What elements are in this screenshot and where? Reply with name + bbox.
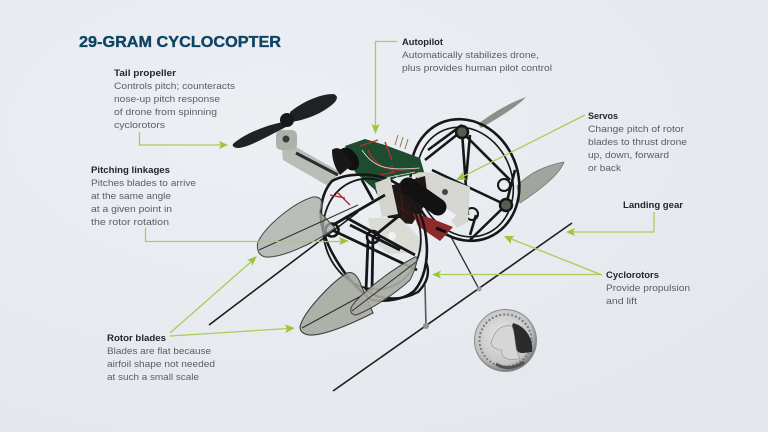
electronics body: [332, 135, 470, 254]
left cyclorotor: [309, 166, 435, 302]
callout: cyclorotors: Cyclorotors: [606, 270, 659, 280]
callout: cyclorotors: [432, 236, 690, 306]
callout: autopilot: [372, 37, 552, 134]
callout: pitching linkages: [91, 165, 349, 245]
callout: cyclorotors: Provide propulsion: [606, 283, 690, 293]
callout: tail propeller: Tail propeller: [114, 68, 176, 78]
callout: rotor blades: Blades are flat because: [107, 346, 211, 356]
callout: autopilot: Automatically stabilizes drone,: [402, 50, 539, 60]
callout: rotor blades: Rotor blades: [107, 333, 166, 343]
callout: servos: Servos: [588, 111, 618, 121]
callout: tail propeller: of drone from spinning: [114, 107, 217, 117]
callout: servos: Change pitch of rotor: [588, 124, 684, 134]
callout: servos: up, down, forward: [588, 150, 669, 160]
callout: rotor blades: [107, 256, 295, 382]
callout: rotor blades: at such a small scale: [107, 372, 199, 382]
callout: landing gear: [566, 200, 683, 236]
rear rotor blades: [478, 97, 564, 203]
landing gear rods: [209, 212, 572, 391]
callout: landing gear: Landing gear: [623, 200, 683, 210]
tail boom and propeller: [233, 94, 340, 186]
callout: pitching linkages: Pitches blades to arrive: [91, 178, 196, 188]
callout: autopilot: Autopilot: [402, 37, 443, 47]
callout: tail propeller: [114, 68, 235, 149]
front rotor blades: [257, 197, 417, 335]
callout: servos: blades to thrust drone: [588, 137, 687, 147]
callout: pitching linkages: Pitching linkages: [91, 165, 170, 175]
callout: pitching linkages: the rotor rotation: [91, 217, 169, 227]
callout: servos: or back: [588, 163, 621, 173]
callout: tail propeller: nose-up pitch response: [114, 94, 220, 104]
right cyclorotor: [393, 103, 537, 257]
callout: pitching linkages: at a given point in: [91, 204, 172, 214]
callout: cyclorotors: and lift: [606, 296, 638, 306]
callout: rotor blades: airfoil shape not needed: [107, 359, 215, 369]
callout: tail propeller: cyclorotors: [114, 120, 165, 130]
callout: pitching linkages: at the same angle: [91, 191, 171, 201]
callout: tail propeller: Controls pitch; counteracts: [114, 81, 235, 91]
title: 29-GRAM CYCLOCOPTER: [79, 34, 281, 51]
callout: autopilot: plus provides human pilot control: [402, 63, 552, 73]
quarter coin for scale: [474, 310, 536, 372]
callout: servos: [456, 111, 687, 180]
drone illustration: [209, 94, 572, 391]
